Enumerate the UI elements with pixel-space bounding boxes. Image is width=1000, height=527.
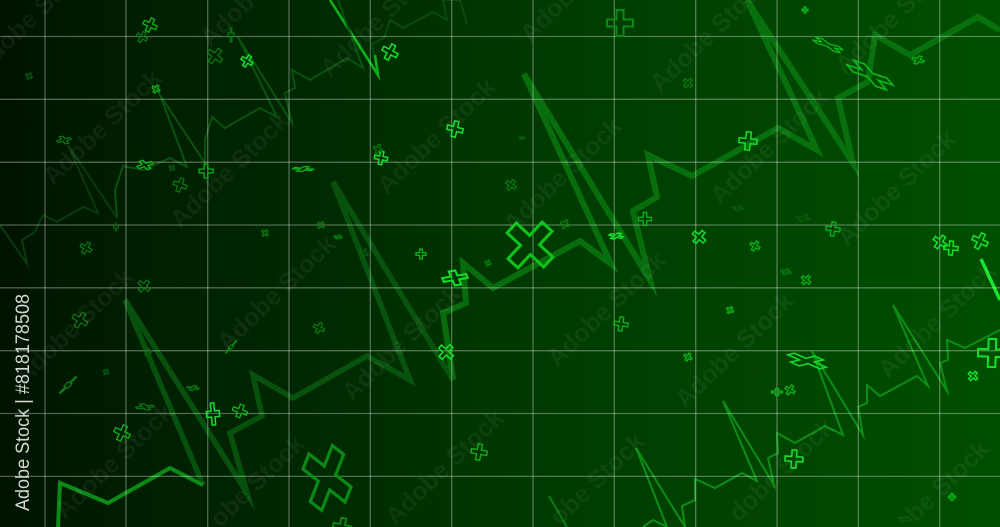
watermarks: Adobe Stock — [705, 83, 834, 209]
medical crosses: large — [295, 10, 1000, 527]
medical crosses: faint — [24, 71, 914, 523]
watermarks: Adobe Stock — [670, 287, 799, 413]
brighter lower-left ECG segment — [58, 468, 203, 527]
watermarks: Adobe Stock — [542, 246, 671, 372]
watermarks: Adobe Stock — [498, 112, 627, 238]
vertical Adobe Stock id label: Adobe Stock | #818178508 — [13, 294, 34, 511]
watermarks: Adobe Stock — [873, 257, 1000, 383]
watermarks: Adobe Stock — [380, 404, 509, 527]
watermarks: dobe Stock — [723, 413, 840, 527]
watermarks: Adobe Stock — [50, 398, 179, 524]
upper-left thin ECG line — [0, 0, 467, 264]
medical crosses: small bright — [206, 41, 991, 469]
watermarks: Adobe Stock — [10, 263, 139, 389]
watermarks: Adobe Stock — [212, 230, 341, 356]
watermarks: Adobe Stock — [165, 107, 294, 233]
watermarks: Adobe Stock — [38, 64, 167, 190]
medical crosses: dim — [55, 28, 792, 411]
watermarks: Adobe Stock — [337, 280, 466, 406]
medical crosses: medium — [111, 7, 956, 500]
watermarks: Adobe Stock — [372, 73, 501, 199]
watermarks: Adobe Stock — [832, 125, 961, 251]
watermarks: be Stock — [900, 435, 995, 527]
lower-right thin ECG line — [549, 259, 1000, 527]
